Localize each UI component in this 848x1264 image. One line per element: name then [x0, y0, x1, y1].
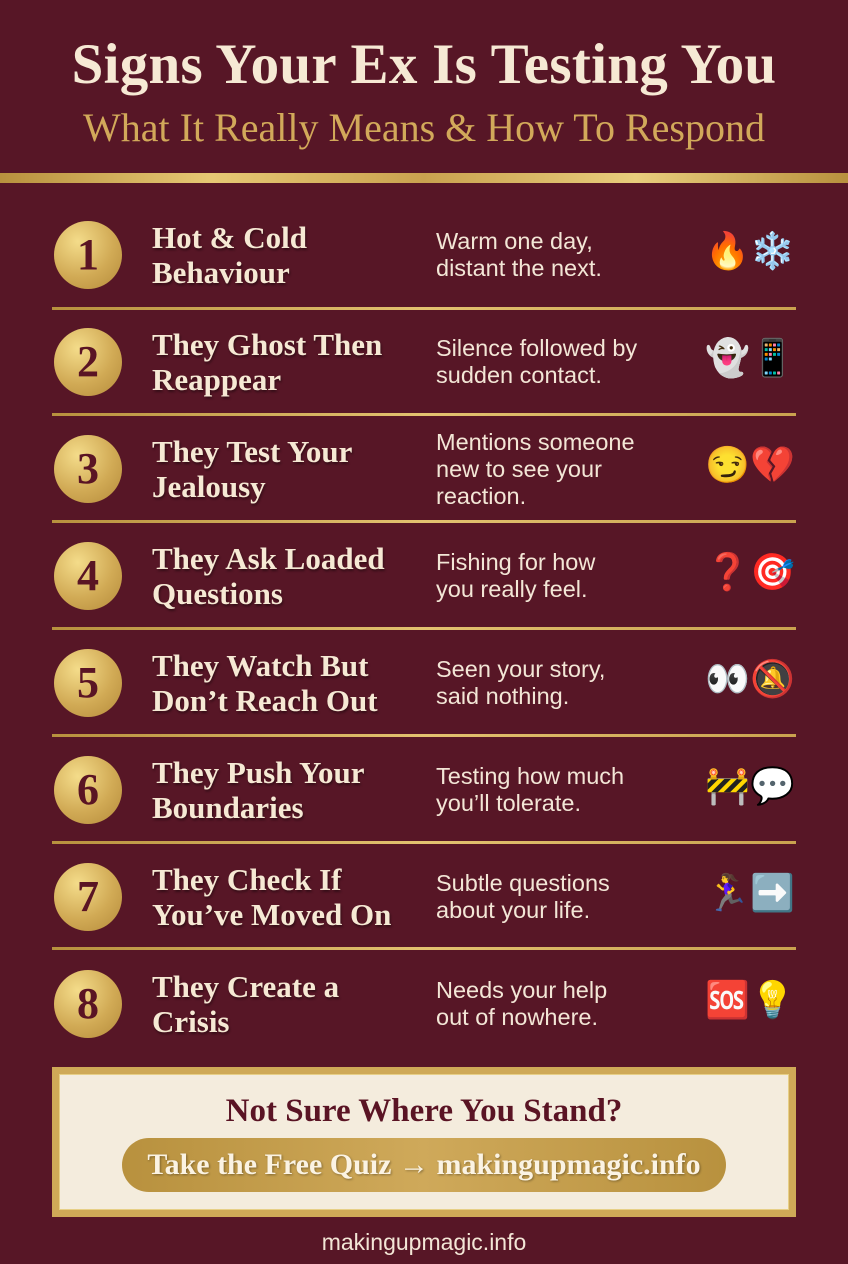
heading 1: Hot & Cold	[152, 220, 307, 255]
heading 6	[152, 755, 366, 825]
number badge 4	[54, 542, 122, 610]
number badge 7	[54, 863, 122, 931]
description 3: Mentions someone	[436, 429, 635, 455]
number badge 8	[54, 970, 122, 1038]
number badge 2: 2	[77, 337, 99, 386]
description 8: out of nowhere.	[436, 1004, 598, 1030]
description 6	[436, 763, 624, 816]
heading 3: Jealousy	[152, 469, 266, 504]
subtitle: What It Really Means & How To Respond	[83, 105, 765, 150]
heading 6: They Push Your	[152, 755, 364, 790]
heading 8: Crisis	[152, 1004, 230, 1039]
number badge 5	[54, 649, 122, 717]
description 3: new to see your	[436, 456, 602, 482]
description 2: sudden contact.	[436, 362, 602, 388]
row 7	[54, 862, 795, 932]
icons 2: 👻📱	[705, 337, 795, 379]
description 5: said nothing.	[436, 683, 569, 709]
description 1	[436, 228, 602, 281]
description 2: Silence followed by	[436, 335, 637, 361]
heading 1	[152, 220, 308, 290]
description 5	[436, 656, 605, 709]
number badge 6	[54, 756, 122, 824]
heading 2: They Ghost Then	[152, 327, 382, 362]
number badge 2	[54, 328, 122, 396]
heading 4	[152, 541, 385, 612]
number badge 7: 7	[77, 872, 99, 921]
icons 8: 🆘💡	[705, 979, 795, 1021]
CTA heading: Not Sure Where You Stand?	[226, 1093, 622, 1129]
heading 4: They Ask Loaded	[152, 541, 385, 576]
footer url: makingupmagic.info	[322, 1229, 526, 1255]
icons 5: 👀🔕	[705, 658, 795, 700]
description 7: about your life.	[436, 897, 590, 923]
row 3	[54, 429, 795, 509]
description 1: Warm one day,	[436, 228, 593, 254]
number badge 1	[54, 221, 122, 289]
description 6: you’ll tolerate.	[436, 790, 581, 816]
number badge 5: 5	[77, 658, 99, 707]
heading 2: Reappear	[152, 362, 281, 397]
row 5	[54, 648, 795, 718]
description 8	[436, 977, 607, 1030]
description 5: Seen your story,	[436, 656, 605, 682]
description 4: Fishing for how	[436, 549, 595, 575]
description 3	[436, 429, 635, 509]
number badge 3: 3	[77, 444, 99, 493]
icons 3: 😏💔	[705, 444, 795, 486]
heading 2	[152, 327, 383, 400]
CTA button	[122, 1138, 726, 1192]
row 1	[54, 220, 795, 290]
description 4: you really feel.	[436, 576, 588, 602]
description 7	[436, 870, 610, 923]
description 8: Needs your help	[436, 977, 607, 1003]
description 4	[436, 549, 596, 602]
description 1: distant the next.	[436, 255, 602, 281]
row 4	[54, 541, 795, 612]
row 8	[54, 969, 795, 1039]
heading 7	[152, 862, 392, 932]
icons 4: ❓🎯	[705, 551, 795, 593]
row 6	[54, 755, 795, 825]
number badge 8: 8	[77, 979, 99, 1028]
description 7: Subtle questions	[436, 870, 610, 896]
CTA button: Take the Free Quiz → makingupmagic.info	[147, 1148, 701, 1181]
heading 7: You’ve Moved On	[152, 897, 391, 932]
icons 1: 🔥❄️	[705, 230, 795, 272]
description 6: Testing how much	[436, 763, 624, 789]
heading 8	[152, 969, 340, 1039]
number badge 1: 1	[77, 230, 99, 279]
heading 5: Don’t Reach Out	[152, 683, 378, 718]
heading 6: Boundaries	[152, 790, 304, 825]
title: Signs Your Ex Is Testing You	[72, 33, 776, 96]
icons 6: 🚧💬	[705, 765, 795, 807]
heading 5	[152, 648, 378, 718]
number badge 4: 4	[77, 551, 99, 600]
heading 8: They Create a	[152, 969, 339, 1004]
number badge 3	[54, 435, 122, 503]
heading 7: They Check If	[152, 862, 341, 897]
row 2	[54, 327, 795, 400]
CTA box	[52, 1067, 796, 1217]
description 2	[436, 335, 638, 388]
heading 3: They Test Your	[152, 434, 352, 469]
number badge 6: 6	[77, 765, 99, 814]
heading 3	[152, 434, 354, 506]
heading 5: They Watch But	[152, 648, 368, 683]
heading 4: Questions	[152, 576, 283, 611]
icons 7: 🏃‍♀️➡️	[705, 872, 795, 914]
heading 1: Behaviour	[152, 255, 290, 290]
description 3: reaction.	[436, 483, 526, 509]
